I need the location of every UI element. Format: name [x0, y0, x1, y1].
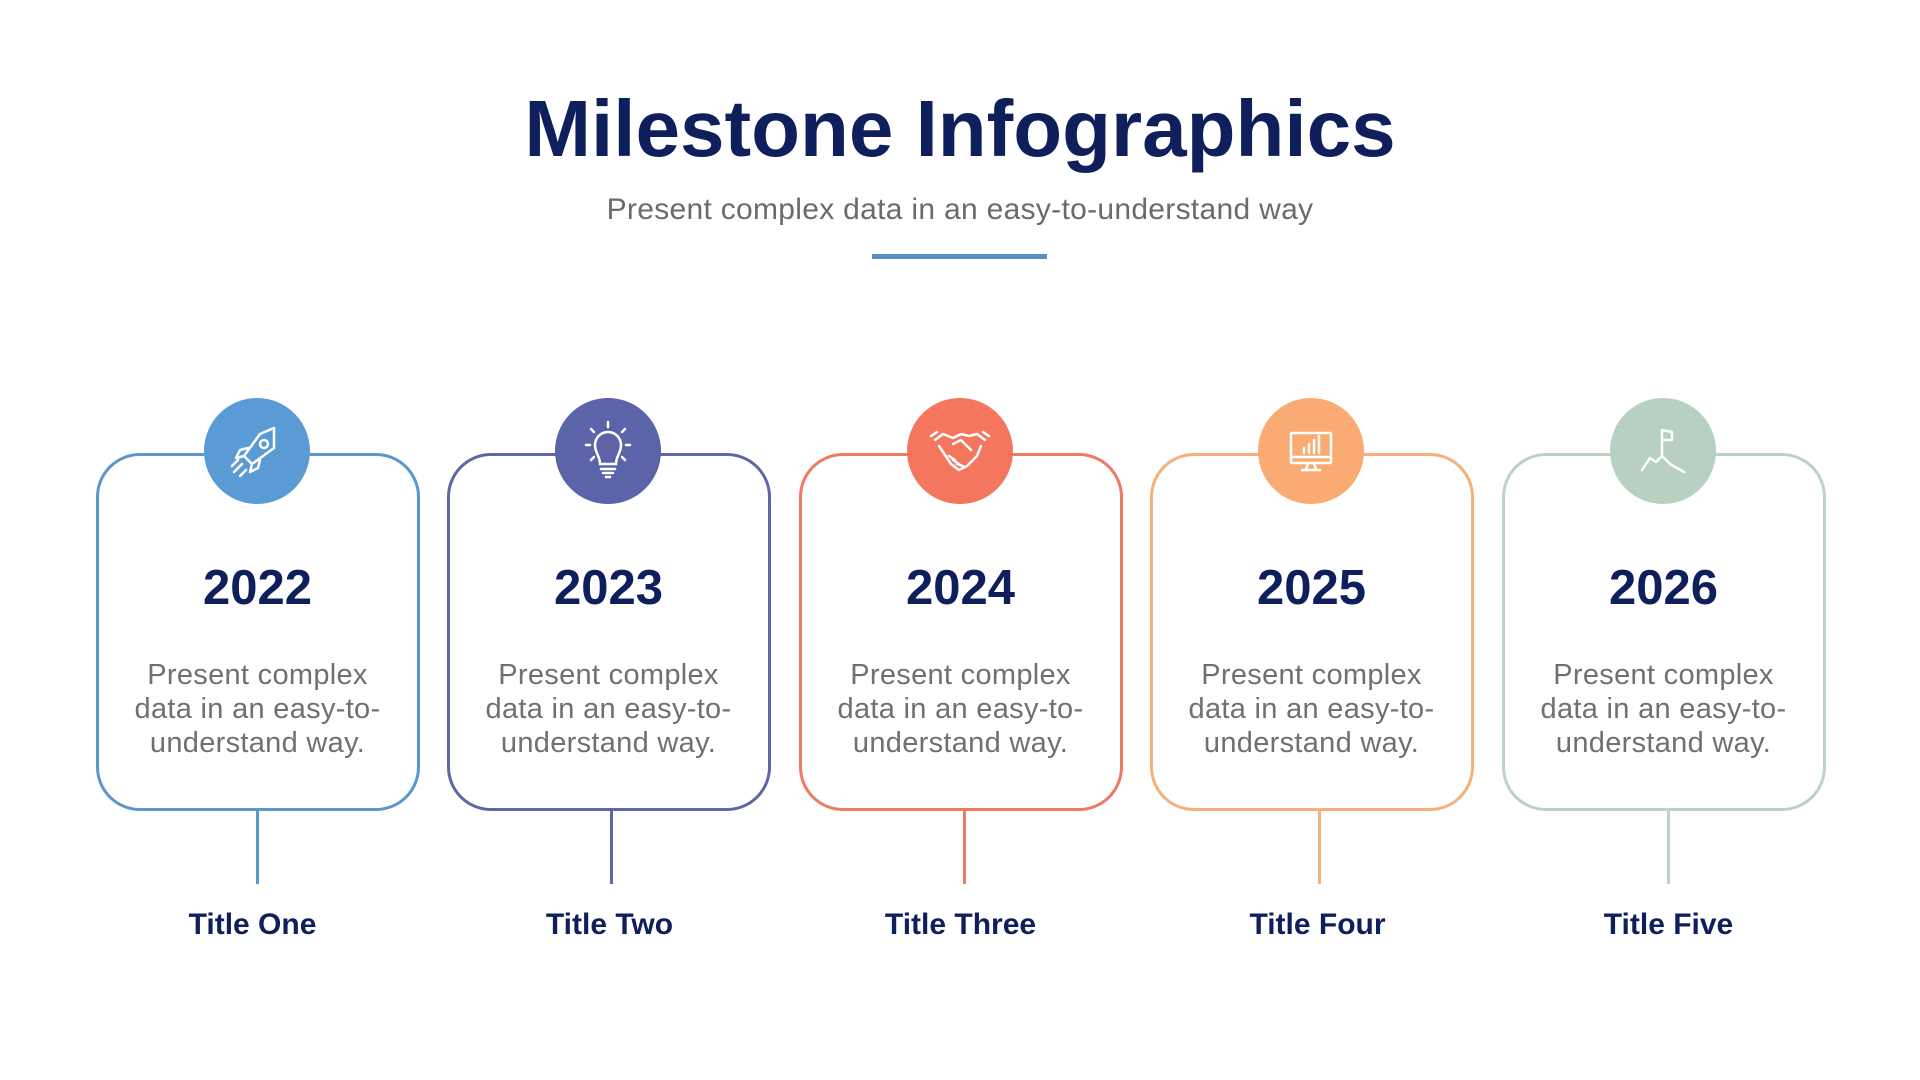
stem 2 [610, 811, 613, 884]
card 2 [447, 453, 771, 811]
icon: monitor chart [1258, 398, 1364, 504]
description 1: understand way. [150, 727, 365, 759]
underline accent [872, 254, 1047, 259]
year 2024: 2024 [906, 561, 1015, 615]
description 5: Present complex [1553, 659, 1774, 691]
description 2: understand way. [501, 727, 716, 759]
description 1 [135, 659, 380, 759]
label: Title Four: Title Four [1249, 908, 1386, 941]
description 3: understand way. [853, 727, 1068, 759]
label: Title Three: Title Three [885, 908, 1036, 941]
description 3: Present complex [850, 659, 1071, 691]
card 1 [96, 453, 420, 811]
description 1: data in an easy-to- [135, 693, 380, 725]
card 5 [1502, 453, 1826, 811]
stem 5 [1667, 811, 1670, 884]
description 4 [1189, 659, 1434, 759]
year 2022: 2022 [203, 561, 312, 615]
card 3 [799, 453, 1123, 811]
description 4: Present complex [1201, 659, 1422, 691]
description 4: data in an easy-to- [1189, 693, 1434, 725]
year 2023: 2023 [554, 561, 663, 615]
label: Title Five: Title Five [1604, 908, 1733, 941]
icon: handshake [907, 398, 1013, 504]
milestone 5 [1502, 398, 1826, 941]
icon: light bulb [555, 398, 661, 504]
icon: rocket [204, 398, 310, 504]
label: Title One: Title One [189, 908, 316, 941]
description 2: Present complex [498, 659, 719, 691]
description 1: Present complex [147, 659, 368, 691]
title: Milestone Infographics [524, 84, 1396, 173]
milestone 3 [799, 398, 1123, 941]
description 5 [1541, 659, 1786, 759]
description 2 [486, 659, 731, 759]
description 4: understand way. [1204, 727, 1419, 759]
stem 4 [1318, 811, 1321, 884]
milestone 1 [96, 398, 420, 941]
card 4 [1150, 453, 1474, 811]
description 3: data in an easy-to- [838, 693, 1083, 725]
year 2026: 2026 [1609, 561, 1718, 615]
stem 1 [256, 811, 259, 884]
year 2025: 2025 [1257, 561, 1366, 615]
label: Title Two: Title Two [546, 908, 673, 941]
description 5: understand way. [1556, 727, 1771, 759]
description 3 [838, 659, 1083, 759]
description 5: data in an easy-to- [1541, 693, 1786, 725]
icon: mountain flag [1610, 398, 1716, 504]
stem 3 [963, 811, 966, 884]
subtitle: Present complex data in an easy-to-understand way [607, 193, 1313, 226]
description 2: data in an easy-to- [486, 693, 731, 725]
milestone 2 [447, 398, 771, 941]
milestone 4 [1150, 398, 1474, 941]
